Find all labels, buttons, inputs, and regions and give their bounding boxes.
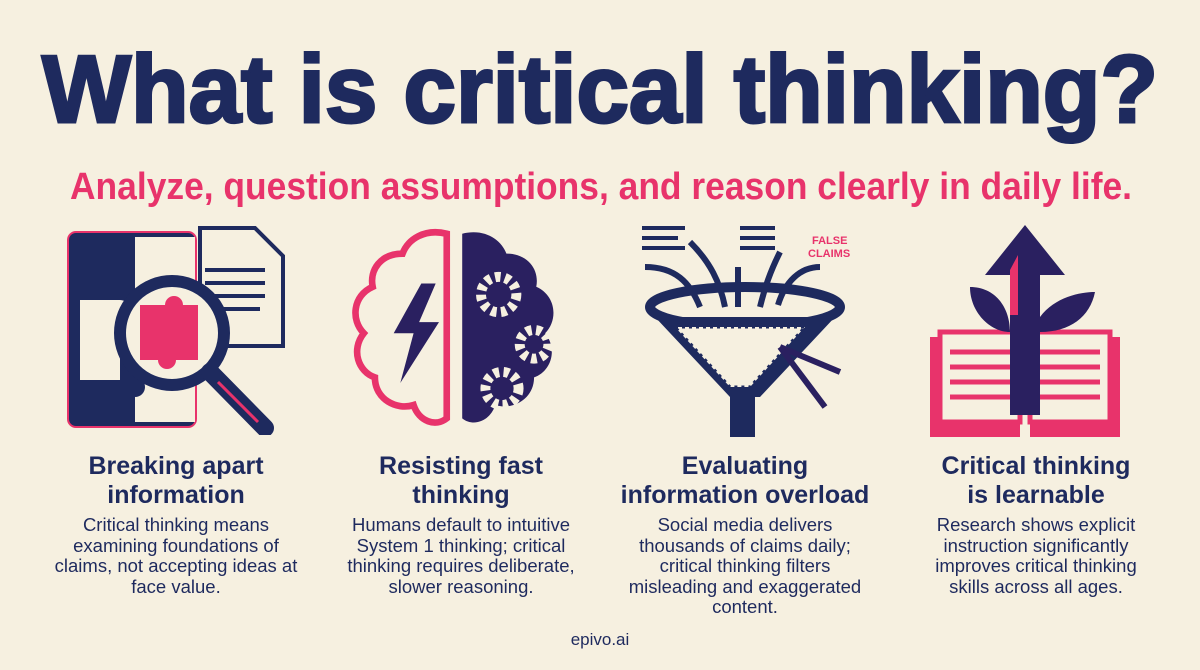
column 2 text: Humans default to intuitive System 1 thinking; critical thinking requires deliberate, slower reasoning. [347,514,575,596]
column 4 text [935,452,1137,597]
title [40,36,1158,208]
title: What is critical thinking? [42,36,1158,143]
column 4 text: is learnable [967,481,1105,509]
column 3 text: critical thinking filters [660,555,830,576]
column 3 text: misleading and exaggerated [629,576,861,596]
subtitle: Analyze, question assumptions, and reason clearly in daily life. [70,166,1132,208]
column 1 text: information [107,481,245,509]
column 4 text: Research shows explicit [937,514,1135,535]
column 3 text: information overload [621,481,869,509]
column 3 text: Evaluating [682,452,808,480]
icon: brain [352,228,554,426]
column 2 text: thinking [412,481,510,509]
column 3 text: content. [712,596,778,617]
icon: funnel [642,226,850,437]
column 3 text [621,452,869,617]
column 2 text: Resisting fast [379,452,543,480]
column 1 text: Critical thinking means examining foundations of claims, not accepting ideas at face value. [55,514,297,596]
column 1 text: Breaking apart [88,452,264,480]
column 4 text: Critical thinking [942,452,1130,480]
icon: puzzle magnifier [67,226,285,435]
column 1 text [55,452,298,596]
column 4 text: instruction significantly [943,534,1129,556]
column 4 text: skills across all ages. [949,576,1123,596]
column 3 text: Social media delivers [658,514,832,535]
column 3 text: thousands of claims daily; [639,534,851,556]
icon: funnel: CLAIMS [808,248,850,260]
footer: epivo.ai [571,630,629,649]
icon: funnel: FALSE [812,235,847,247]
icon: book with arrow [930,225,1120,437]
column 4 text: improves critical thinking [935,555,1137,576]
column 2 text [347,452,575,597]
